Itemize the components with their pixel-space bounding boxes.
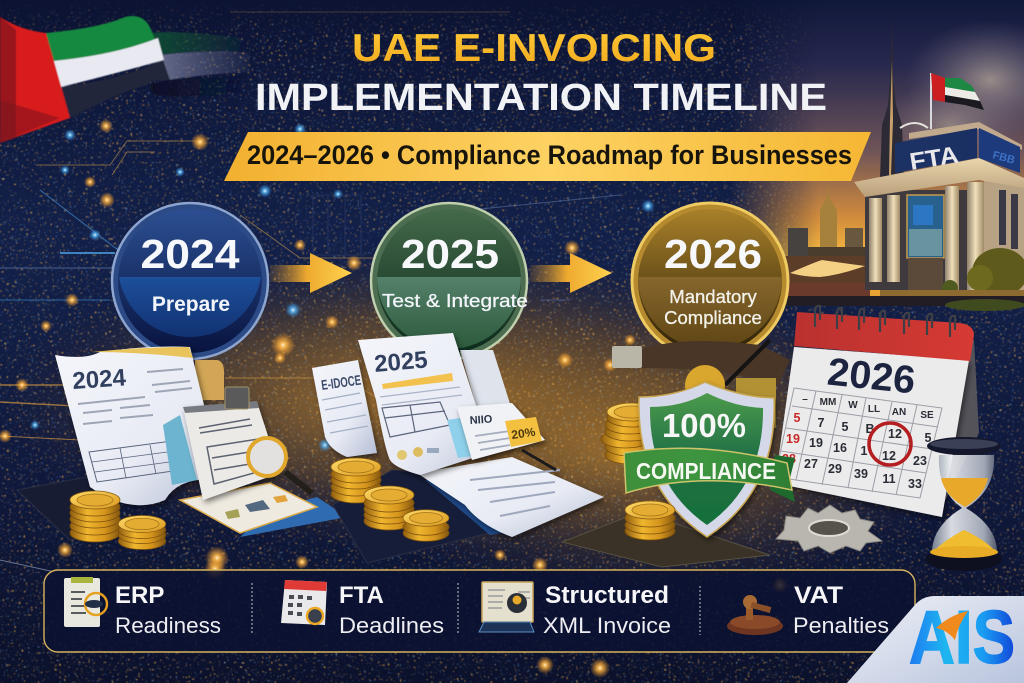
wall calendar: 11 — [882, 472, 896, 486]
wall calendar: 5 — [794, 411, 801, 425]
item: FTA Deadlines — [281, 580, 444, 638]
item: VAT Penalties — [727, 582, 889, 638]
label Mandatory Compliance: Compliance — [664, 307, 762, 328]
coin stacks — [70, 491, 166, 550]
wall calendar: W — [848, 400, 858, 411]
subtitle banner: 2024–2026 • Compliance Roadmap for Businesses — [247, 140, 852, 170]
20% tag — [505, 417, 542, 447]
red circled date — [869, 423, 911, 465]
colored tabs — [163, 415, 197, 485]
wall calendar: 2026 — [825, 351, 917, 403]
blue tabs — [447, 418, 473, 458]
title: Implementation Timeline: IMPLEMENTATION TIMELINE — [255, 77, 827, 119]
bottom panel: key topics — [44, 570, 915, 652]
illustration: 2025 test documents — [312, 333, 604, 563]
NIIO card — [457, 403, 545, 460]
wall calendar: – — [802, 394, 808, 405]
wall calendar: 27 — [804, 457, 818, 471]
invoice 2024: 2024 — [72, 364, 127, 395]
gear — [776, 505, 882, 553]
wall calendar: 7 — [818, 416, 825, 430]
item: VAT Penalties: Penalties — [793, 613, 889, 638]
building: glass window — [907, 195, 944, 258]
building: side sign: FBB — [991, 149, 1016, 167]
step 2026: gold badge — [632, 203, 788, 359]
wall calendar: SE — [920, 410, 934, 421]
wall calendar: 5 — [842, 420, 849, 434]
icon: document with gear — [64, 577, 107, 627]
skyline: Burj tower — [880, 17, 928, 178]
building: FTA headquarters — [854, 122, 1024, 311]
wall calendar: 19 — [786, 432, 800, 446]
step 2024: blue badge — [112, 203, 268, 359]
item: ERP Readiness: Readiness — [115, 613, 221, 638]
skyline: city buildings — [785, 182, 1024, 306]
100%: 100% — [662, 407, 746, 444]
title: UAE E-Invoicing: UAE E-INVOICING — [352, 27, 716, 70]
wall calendar: B — [865, 422, 875, 436]
wall calendar — [775, 306, 979, 517]
back sheet right — [460, 350, 512, 420]
wall calendar: 12 — [882, 449, 896, 463]
folder — [195, 360, 224, 400]
E-invoice sheet — [312, 360, 377, 457]
building: FTA sign: FTA — [908, 142, 960, 176]
item: Structured XML Invoice: XML Invoice — [543, 613, 671, 638]
compliance ribbon — [624, 448, 795, 502]
logo: AIS corner badge — [847, 595, 1024, 683]
wall calendar: 5 — [925, 431, 932, 445]
year 2024: 2024 — [140, 231, 240, 277]
wall calendar: 28 — [782, 452, 796, 466]
clipboard sheet — [183, 401, 280, 500]
building: trees — [880, 248, 1024, 311]
main 2025 invoice: 2025 — [373, 346, 429, 378]
item: VAT Penalties: VAT — [794, 582, 843, 609]
coin stacks — [331, 458, 449, 541]
flag: UAE waving flag top left — [0, 16, 250, 143]
arrow 2024 to 2025 — [270, 253, 352, 293]
gavel behind shield — [612, 340, 790, 428]
year 2026: 2026 — [664, 231, 762, 277]
item: ERP Readiness: ERP — [115, 582, 164, 609]
item: Structured XML Invoice — [479, 582, 671, 638]
arrow 2025 to 2026 — [530, 253, 612, 293]
shield — [639, 382, 774, 537]
magnifying glass — [248, 438, 312, 493]
item: ERP Readiness — [64, 577, 221, 638]
icon: gavel — [727, 595, 783, 635]
front coin stack — [625, 501, 675, 540]
wall calendar: 1 — [861, 444, 868, 458]
label Prepare: Prepare — [152, 293, 230, 316]
compliance ribbon: COMPLIANCE — [636, 458, 776, 484]
invoice 2024 — [55, 347, 222, 505]
wall calendar: 29 — [828, 462, 842, 476]
step 2025: green badge — [371, 203, 528, 359]
clip — [225, 387, 249, 409]
icon: calendar with clock — [281, 580, 327, 625]
illustration: 2024 prepare documents — [17, 347, 347, 550]
item: FTA Deadlines: FTA — [339, 582, 384, 609]
wall calendar: 16 — [833, 441, 847, 455]
E-invoice sheet: E-IDOCE — [320, 372, 362, 393]
wall calendar: 39 — [854, 467, 868, 481]
blue folder and booklet — [240, 497, 347, 537]
illustration: 2026 compliance scene — [562, 306, 1002, 571]
icon: laptop with invoice — [479, 582, 534, 632]
item: FTA Deadlines: Deadlines — [339, 613, 444, 638]
lower invoice sheet — [417, 457, 604, 537]
NIIO card: NIIO — [469, 413, 493, 427]
wall calendar: 19 — [809, 436, 823, 450]
wall calendar: AN — [892, 407, 906, 418]
wall calendar: 23 — [913, 454, 927, 468]
wall calendar: MM — [820, 397, 836, 408]
background: dusk sky behind skyline — [730, 0, 1024, 300]
rooftop UAE flag — [930, 73, 984, 129]
wall calendar: 12 — [888, 427, 902, 441]
main 2025 invoice — [358, 333, 513, 475]
subtitle banner — [224, 132, 871, 181]
label Test & Integrate: Test & Integrate — [382, 290, 528, 311]
hourglass — [926, 437, 1002, 571]
year 2025: 2025 — [401, 231, 499, 277]
pen — [522, 450, 556, 470]
item: Structured XML Invoice: Structured — [545, 582, 669, 609]
coin stack — [601, 403, 657, 464]
wall calendar: LL — [868, 404, 880, 415]
20% tag: 20% — [510, 425, 537, 442]
wall calendar: 33 — [908, 477, 922, 491]
label Mandatory Compliance: Mandatory — [669, 286, 757, 307]
